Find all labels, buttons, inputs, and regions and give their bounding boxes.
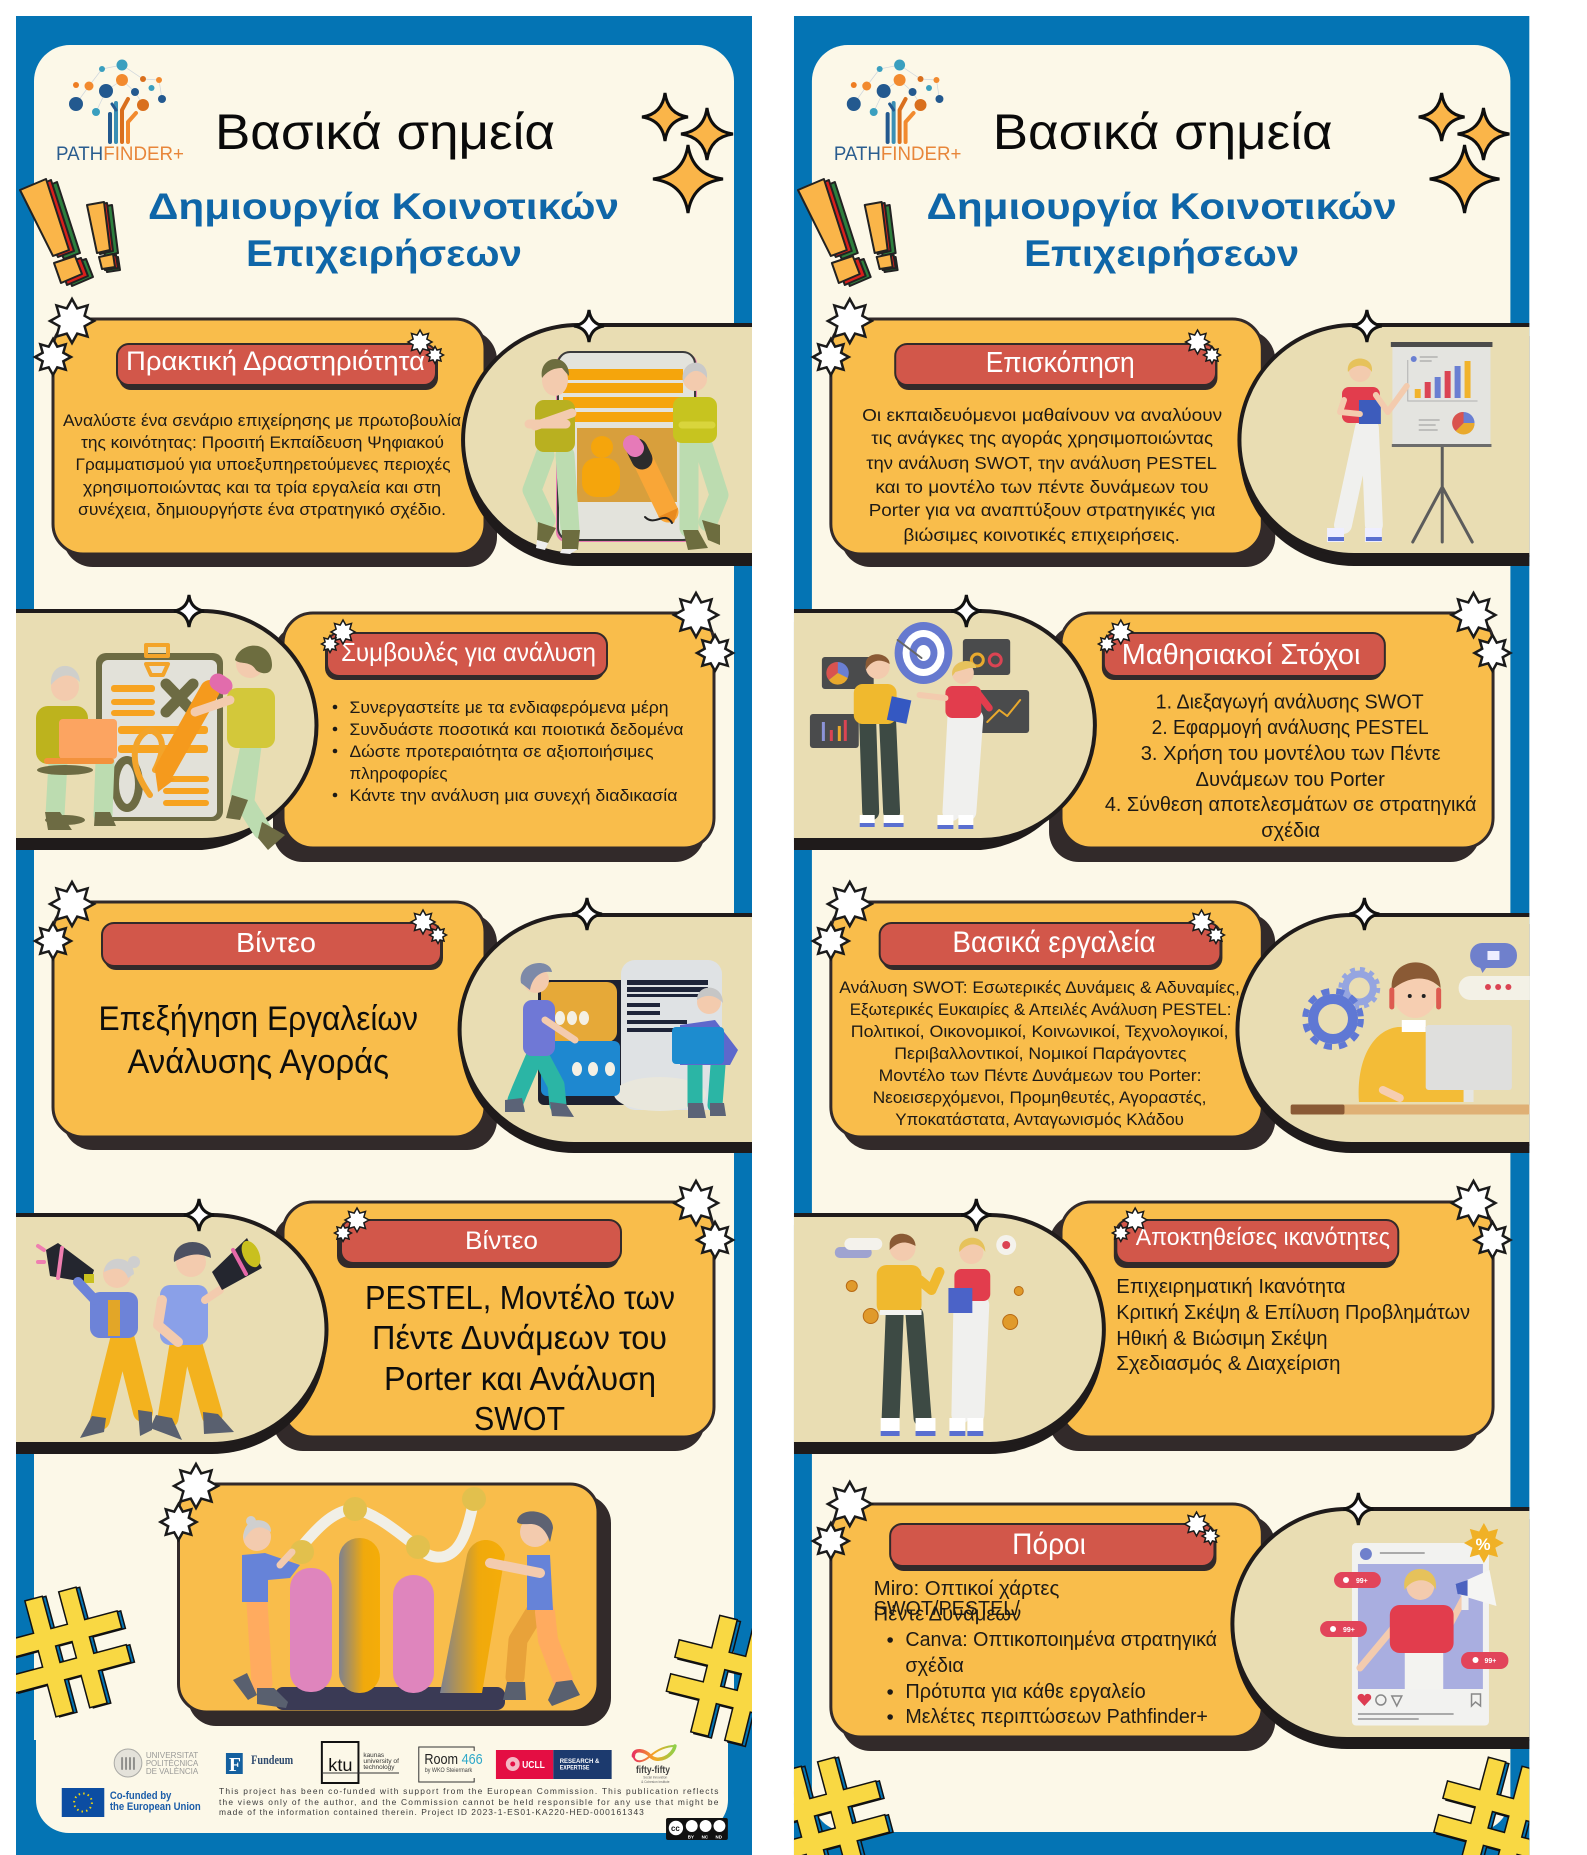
icon: hash right <box>666 1614 752 1748</box>
resources list <box>874 1578 1217 1728</box>
illustration panel <box>1232 1493 1537 1749</box>
resources list: Μελέτες περιπτώσεων Pathfinder+ <box>905 1706 1208 1728</box>
logo: fifty-fifty: fifty-fifty <box>636 1765 670 1776</box>
body text: Εξωτερικές Ευκαιρίες & Απειλές Ανάλυση PESTEL: <box>850 1000 1231 1019</box>
icon: creative commons badge: cc <box>671 1824 680 1833</box>
logo: PATHFINDER+ <box>56 144 184 165</box>
stars <box>813 882 1224 959</box>
body text: βιώσιμες κοινοτικές επιχειρήσεις. <box>903 525 1180 545</box>
heading pill: Συμβουλές για ανάλυση <box>341 637 596 667</box>
heading pill <box>880 923 1222 970</box>
right poster <box>752 60 1575 1855</box>
stars <box>322 593 733 671</box>
illustration panel <box>10 1199 326 1454</box>
stars <box>1098 593 1510 671</box>
resources list: Canva: Οπτικοποιημένα στρατηγικά <box>905 1629 1217 1651</box>
numbered list: 3. Χρήση του μοντέλου των Πέντε <box>1141 743 1441 765</box>
body text: Πέντε Δυνάμεων του <box>372 1319 667 1356</box>
icon: sparkles <box>1419 93 1509 213</box>
heading pill: Μαθησιακοί Στόχοι <box>1122 639 1360 671</box>
resources list: Πρότυπα για κάθε εργαλείο <box>905 1681 1146 1703</box>
numbered list: 1. Διεξαγωγή ανάλυσης SWOT <box>1156 692 1424 714</box>
heading pill <box>102 923 443 970</box>
icon: exclamation marks <box>20 179 120 286</box>
logo: Room 466: by WKO Steiermark <box>425 1767 473 1774</box>
heading pill <box>117 344 438 390</box>
illustration panel <box>10 595 316 850</box>
logo: KTU <box>322 1742 399 1783</box>
logo: Fundeum: F <box>229 1754 241 1776</box>
stars <box>35 882 446 959</box>
skill list <box>1116 1276 1470 1375</box>
body text: Ανάλυσης Αγοράς <box>128 1043 389 1081</box>
logo: UCLL <box>496 1750 612 1779</box>
stars <box>813 1482 1219 1559</box>
body text: Porter για να αναπτύξουν στρατηγικές για <box>869 500 1215 520</box>
body text: Γραμματισμού για υποεξυπηρετούμενες περιοχές <box>76 455 450 474</box>
resources list: Πέντε Δυνάμεων <box>874 1604 1021 1626</box>
heading pill <box>337 1220 621 1268</box>
body text: Μοντέλο των Πέντε Δυνάμεων του Porter: <box>879 1066 1202 1085</box>
body text: της κοινότητας: Προσιτή Εκπαίδευση Ψηφιακού <box>81 433 444 452</box>
icon: hash bottom right <box>1425 1749 1575 1855</box>
heading pill: Βίντεο <box>465 1227 538 1255</box>
title: Βασικά σημεία <box>215 104 555 160</box>
logo: KTU: university of <box>363 1758 399 1765</box>
body text: την ανάλυση SWOT, την ανάλυση PESTEL <box>866 453 1217 473</box>
panel: practical activity <box>35 299 760 567</box>
subtitle: Δημιουργία Κοινοτικών <box>148 186 619 227</box>
stars <box>35 299 444 375</box>
stars <box>160 1464 218 1540</box>
logo: fifty-fifty: & Cohesion Institute <box>641 1780 670 1784</box>
panel: key tools <box>813 882 1548 1153</box>
logo: Fundeum: Fundeum <box>251 1752 293 1767</box>
panel: chart illustration <box>160 1464 611 1726</box>
illustration panel: % <box>1476 1535 1491 1554</box>
panel: video PESTEL <box>10 1181 733 1454</box>
left poster <box>0 60 807 1840</box>
numbered list: 2. Εφαρμογή ανάλυσης PESTEL <box>1152 717 1429 739</box>
illustration panel <box>460 898 760 1153</box>
body text <box>862 405 1222 545</box>
illustration panel <box>788 595 1095 850</box>
heading pill <box>895 344 1217 390</box>
panel: resources <box>813 1482 1537 1751</box>
icon: sparkles <box>642 93 733 213</box>
body text <box>839 978 1240 1129</box>
panel: overview <box>813 299 1537 567</box>
illustration panel: 99+ <box>1356 1578 1368 1585</box>
icon: creative commons badge: BY <box>688 1834 694 1840</box>
heading pill: Πόροι <box>1012 1528 1086 1561</box>
numbered list <box>1105 692 1477 842</box>
left poster background <box>16 16 752 1855</box>
numbered list: 4. Σύνθεση αποτελεσμάτων σε στρατηγικά <box>1105 794 1477 816</box>
bullet list: πληροφορίες <box>350 764 448 783</box>
subtitle: Επιχειρήσεων <box>1024 233 1299 274</box>
logo: UCLL: UCLL <box>522 1760 545 1771</box>
panel: analysis tips <box>10 593 733 862</box>
logo: UCLL: EXPERTISE <box>560 1764 590 1772</box>
stars <box>334 1181 733 1258</box>
subtitle <box>927 186 1397 274</box>
icon: hash left <box>16 1586 136 1718</box>
body text <box>63 411 461 519</box>
body text: Πολιτικοί, Οικονομικοί, Κοινωνικοί, Τεχνολογικοί, <box>851 1022 1228 1041</box>
numbered list: σχέδια <box>1261 820 1320 842</box>
logo: KTU: technology <box>363 1764 395 1771</box>
body text: συνέχεια, δημιουργήστε ένα στρατηγικό σχέδιο. <box>78 500 446 519</box>
logo: Room 466 <box>419 1747 483 1782</box>
icon: hash bottom left <box>752 1748 902 1855</box>
icon: exclamation marks <box>798 179 898 286</box>
heading pill: Βίντεο <box>236 927 316 958</box>
body text: Νεοεισερχόμενοι, Προμηθευτές, Αγοραστές, <box>873 1088 1206 1107</box>
logo: UPV: DE VALÈNCIA <box>146 1766 199 1776</box>
stars <box>1112 1181 1510 1258</box>
heading pill: Επισκόπηση <box>986 347 1135 379</box>
bullet list: Δώστε προτεραιότητα σε αξιοποιήσιμες <box>350 742 654 761</box>
body text: SWOT <box>474 1400 565 1437</box>
skill list: Επιχειρηματική Ικανότητα <box>1116 1276 1345 1298</box>
logo <box>834 60 961 165</box>
body text: Ανάλυση SWOT: Εσωτερικές Δυνάμεις & Αδυναμίες, <box>839 978 1240 997</box>
panel: learning objectives <box>788 593 1510 862</box>
bullet list: Κάντε την ανάλυση μια συνεχή διαδικασία <box>350 786 678 805</box>
icon: creative commons badge <box>666 1818 728 1840</box>
panel: acquired skills <box>788 1181 1510 1454</box>
illustration panel <box>463 310 760 566</box>
heading pill <box>1114 1220 1398 1268</box>
logo: EU co-funded: the European Union <box>110 1801 201 1813</box>
disclaimer: made of the information contained therein. Project ID 2023-1-ES01-KA220-HED-000161343 <box>219 1807 644 1817</box>
body text: Porter και Ανάλυση <box>384 1360 656 1397</box>
illustration panel <box>1237 898 1548 1153</box>
logo: Fundeum <box>226 1753 293 1774</box>
illustration panel: 99+ <box>1484 1658 1496 1665</box>
illustration panel <box>788 1199 1104 1454</box>
skill list: Ηθική & Βιώσιμη Σκέψη <box>1116 1328 1328 1350</box>
resources list: SWOT/PESTEL/ <box>874 1598 1020 1620</box>
right poster background <box>794 16 1529 1855</box>
disclaimer: This project has been co-funded with support from the European Commission. This publication reflects <box>219 1786 718 1796</box>
heading pill <box>325 633 607 680</box>
bullet list: Συνεργαστείτε με τα ενδιαφερόμενα μέρη <box>350 698 668 717</box>
body text: τις ανάγκες της αγοράς χρησιμοποιώντας <box>871 428 1213 448</box>
logo: UPV: UNIVERSITAT <box>146 1750 198 1760</box>
subtitle <box>148 186 619 274</box>
title: Βασικά σημεία <box>993 104 1333 160</box>
icon: creative commons badge: ND <box>715 1834 723 1840</box>
heading pill: Αποκτηθείσες ικανότητες <box>1136 1224 1390 1251</box>
subtitle: Δημιουργία Κοινοτικών <box>927 186 1397 227</box>
logo: UPV: POLITÈCNICA <box>146 1758 199 1768</box>
logo: PATHFINDER+ <box>834 144 961 165</box>
heading pill <box>1102 633 1385 680</box>
skill list: Σχεδιασμός & Διαχείριση <box>1116 1353 1341 1375</box>
body text <box>365 1279 675 1437</box>
bullet list: Συνδυάστε ποσοτικά και ποιοτικά δεδομένα <box>350 720 684 739</box>
body text: Επεξήγηση Εργαλείων <box>98 1000 418 1038</box>
bullet list <box>333 698 684 805</box>
logo: Room 466: Room 466 <box>424 1752 483 1768</box>
logo: fifty-fifty: Social Innovation <box>643 1775 668 1780</box>
stars <box>813 299 1220 375</box>
resources list: σχέδια <box>905 1655 964 1677</box>
subtitle: Επιχειρήσεων <box>246 233 522 274</box>
resources list: Miro: Οπτικοί χάρτες <box>874 1578 1059 1600</box>
logo: fifty-fifty <box>633 1746 675 1784</box>
body text: Οι εκπαιδευόμενοι μαθαίνουν να αναλύουν <box>862 405 1222 425</box>
body text: Αναλύστε ένα σενάριο επιχείρησης με πρωτοβουλία <box>63 411 461 430</box>
disclaimer <box>219 1786 719 1817</box>
logo: UPV <box>114 1749 199 1777</box>
footer: partner logos and disclaimer <box>62 1742 728 1840</box>
heading pill: Πρακτική Δραστηριότητα <box>126 346 425 376</box>
logo: KTU: kaunas <box>363 1752 384 1759</box>
logo: KTU: ktu <box>328 1755 353 1775</box>
heading pill: Βασικά εργαλεία <box>952 926 1156 959</box>
body text: PESTEL, Μοντέλο των <box>365 1279 675 1316</box>
body text: και το μοντέλο των πέντε δυνάμεων του <box>875 477 1208 497</box>
body text: Περιβαλλοντικοί, Νομικοί Παράγοντες <box>894 1044 1187 1063</box>
disclaimer: the views only of the author, and the Commission cannot be held responsible for any use that might be <box>219 1797 719 1807</box>
skill list: Κριτική Σκέψη & Επίλυση Προβλημάτων <box>1116 1302 1470 1324</box>
logo: EU co-funded: Co-funded by <box>110 1790 172 1802</box>
numbered list: Δυνάμεων του Porter <box>1196 769 1385 791</box>
illustration panel: 99+ <box>1343 1627 1355 1634</box>
panel: video tools <box>35 882 760 1153</box>
heading pill <box>890 1524 1216 1571</box>
logo: UCLL: RESEARCH & <box>560 1758 600 1765</box>
body text: Υποκατάστατα, Ανταγωνισμός Κλάδου <box>895 1110 1184 1129</box>
illustration panel <box>1239 310 1537 566</box>
logo <box>56 60 184 165</box>
icon: creative commons badge: NC <box>702 1834 709 1840</box>
body text: χρησιμοποιώντας και τα τρία εργαλεία και στη <box>83 478 441 497</box>
body text <box>98 1000 418 1081</box>
bar chart illustration <box>233 1487 580 1710</box>
logo: EU co-funded <box>62 1788 201 1817</box>
